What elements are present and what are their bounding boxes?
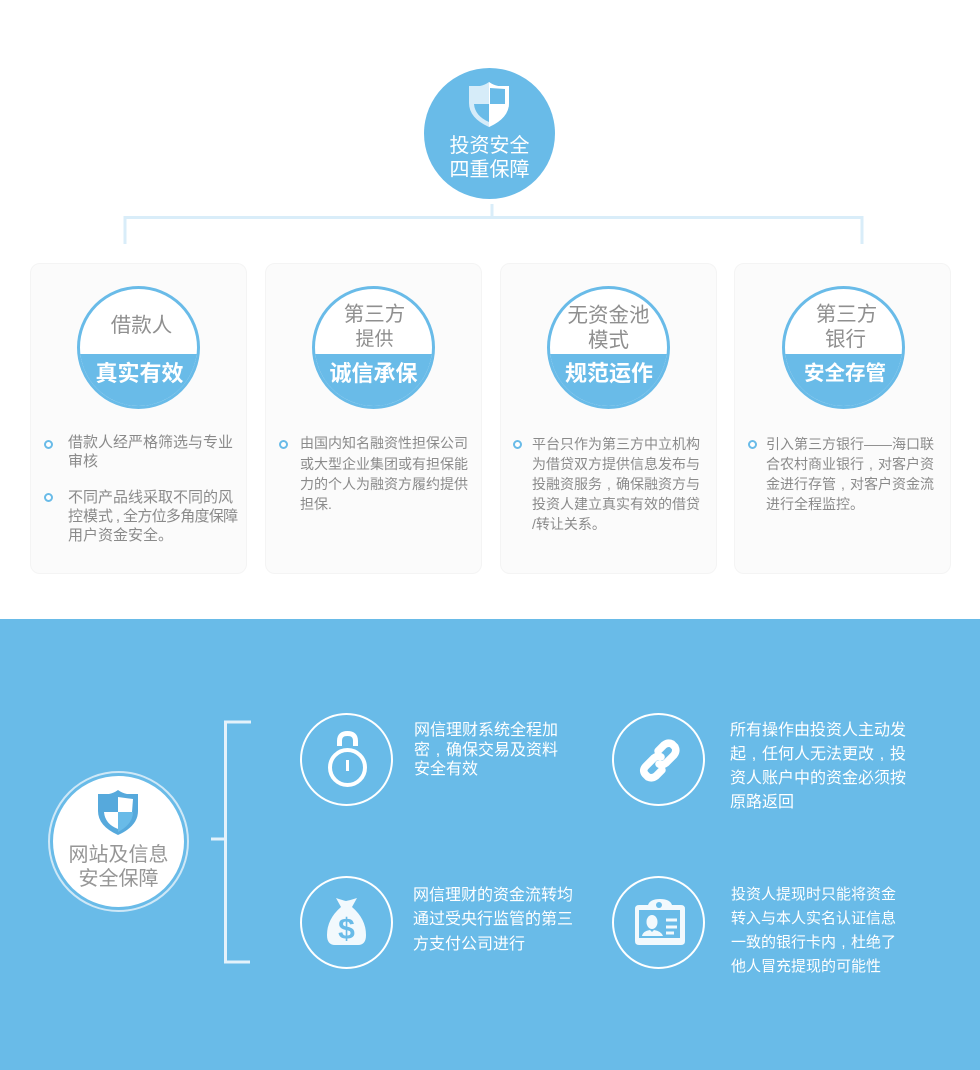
list: third-party guarantee: 担保. [300, 496, 332, 512]
feature text: 网信理财系统全程加 [414, 722, 558, 739]
list: no capital pool: 投资人建立真实有效的借贷 [532, 496, 700, 512]
list: no capital pool: /转让关系。 [532, 516, 606, 532]
icon: money bag: $ [338, 913, 355, 946]
feature text: 转入与本人实名认证信息 [731, 910, 896, 927]
feature text: , [841, 934, 846, 951]
icon: shield [469, 82, 509, 127]
badge title: 投资安全 [450, 135, 530, 157]
panel: website security [0, 619, 980, 1070]
badge: no capital pool: 规范运作 [565, 361, 653, 386]
list: third-party guarantee: 由国内知名融资性担保公司 [300, 435, 468, 451]
feature text [730, 721, 906, 811]
feature text: , [436, 742, 440, 758]
panel: no capital pool [500, 263, 717, 574]
badge disc [53, 776, 184, 907]
list: borrower: 借款人经严格筛选与专业 [68, 434, 233, 451]
badge: borrower [77, 286, 200, 409]
list: no capital pool: 投融资服务 确保融资方与 [532, 476, 700, 492]
badge: third-party bank: 银行 [825, 328, 866, 351]
list: borrower: 控模式 全方位多角度保障 [68, 508, 237, 525]
feature: original route [612, 713, 906, 811]
badge: third-party bank [782, 286, 905, 409]
list: no capital pool: 为借贷双方提供信息发布与 [532, 456, 700, 472]
feature text: , [752, 746, 756, 763]
list: borrower: , [116, 508, 120, 525]
top badge: investment safety [424, 68, 555, 199]
feature text: 他人冒充提现的可能性 [731, 958, 881, 975]
badge: website and information security [48, 771, 189, 912]
feature text [731, 886, 896, 975]
icon: ID badge [612, 876, 705, 969]
feature text: 资人账户中的资金必须按 [730, 770, 906, 787]
feature text: 起 任何人无法更改 投 [730, 746, 906, 763]
feature text: 所有操作由投资人主动发 [730, 722, 906, 739]
panel: borrower [30, 263, 247, 574]
badge: third-party guarantee: 诚信承保 [329, 361, 418, 386]
list: third-party guarantee: 或大型企业集团或有担保能 [300, 456, 468, 472]
icon: padlock [300, 713, 393, 806]
connector tree [124, 204, 864, 244]
badge title: 网站及信息 [68, 844, 168, 866]
badge title [450, 134, 530, 181]
feature: third-party payment [300, 876, 573, 969]
list: third-party bank: 引入第三方银行——海口联 [766, 436, 934, 452]
list: third-party bank: , [841, 476, 845, 492]
badge title: 四重保障 [450, 159, 530, 181]
feature text: 投资人提现时只能将资金 [731, 886, 896, 903]
badge: third-party guarantee: 第三方 [344, 303, 405, 326]
badge: borrower: 借款人 [111, 314, 172, 337]
feature text: 网信理财的资金流转均 [413, 887, 573, 904]
badge: third-party bank: 安全存管 [804, 362, 886, 385]
badge title: 安全保障 [78, 868, 158, 890]
feature text: 安全有效 [414, 761, 478, 778]
feature text: 一致的银行卡内 杜绝了 [731, 934, 896, 951]
feature text: , [880, 746, 884, 763]
badge: no capital pool: 无资金池 [568, 304, 650, 327]
feature: encryption [300, 713, 558, 806]
list: third-party bank: , [869, 456, 873, 472]
feature text [414, 721, 558, 778]
feature text: 方支付公司进行 [413, 936, 525, 953]
feature text: 原路返回 [730, 794, 794, 811]
list: no capital pool: , [607, 476, 611, 492]
feature: real-name withdrawal [612, 876, 896, 975]
badge title [68, 844, 168, 890]
feature text [413, 886, 573, 953]
list: third-party guarantee [279, 435, 468, 512]
list: borrower: 不同产品线采取不同的风 [68, 489, 233, 506]
badge: third-party guarantee: 提供 [355, 329, 394, 350]
icon: money bag [300, 876, 393, 969]
badge: third-party guarantee [312, 286, 435, 409]
badge: no capital pool: 模式 [588, 329, 629, 352]
panel: third-party bank [734, 263, 951, 574]
feature text: 密 确保交易及资料 [414, 742, 558, 758]
badge: no capital pool [547, 286, 670, 409]
badge: borrower: 真实有效 [95, 361, 184, 386]
feature text: 通过受央行监管的第三 [413, 911, 573, 928]
list: third-party bank: 进行全程监控。 [766, 496, 864, 512]
bracket [211, 720, 251, 964]
list: third-party bank: 合农村商业银行 对客户资 [766, 456, 934, 472]
list: third-party bank [748, 436, 934, 512]
badge: third-party bank: 第三方 [816, 303, 877, 326]
list: no capital pool: 平台只作为第三方中立机构 [532, 436, 700, 452]
list: borrower: 审核 [68, 453, 98, 470]
panel: third-party guarantee [265, 263, 482, 574]
icon: shield [98, 790, 138, 835]
list: borrower [44, 434, 238, 544]
list: third-party bank: 金进行存管 对客户资金流 [766, 476, 934, 492]
list: borrower: 用户资金安全。 [68, 527, 173, 544]
list: no capital pool [513, 436, 700, 532]
list: third-party guarantee: 力的个人为融资方履约提供 [300, 476, 468, 492]
icon: chain link [612, 713, 705, 806]
